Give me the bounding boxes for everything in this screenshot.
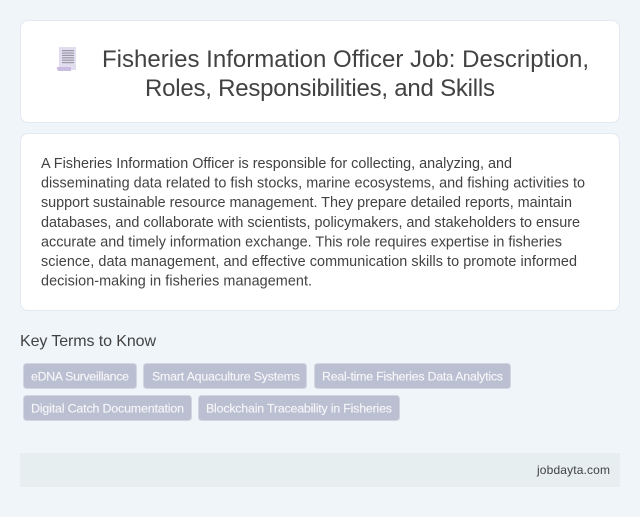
title: Fisheries Information Officer Job: Description, (102, 46, 589, 73)
tag: eDNA Surveillance (24, 364, 136, 388)
description text: A Fisheries Information Officer is responsible for collecting, analyzing, and (41, 156, 512, 172)
description text: support sustainable resource management. They prepare detailed reports, maintain (41, 195, 572, 211)
tag: Blockchain Traceability in Fisheries (198, 396, 400, 420)
tag: Smart Aquaculture Systems (144, 364, 306, 388)
tag: Digital Catch Documentation: Digital Catch Documentation (31, 402, 184, 416)
tag: Real-time Fisheries Data Analytics (314, 364, 510, 388)
panel: description card (20, 133, 620, 311)
description text: databases, and collaborate with scientists, policymakers, and stakeholders to ensure (41, 215, 580, 231)
title (102, 46, 589, 102)
description text: disseminating data related to fish stocks, marine ecosystems, and fishing activities to (41, 176, 585, 192)
heading: key terms: Key Terms to Know (20, 333, 156, 350)
description text: decision-making in fisheries management. (41, 274, 312, 290)
description text: science, data management, and effective communication skills to promote informed (41, 254, 577, 270)
tag: eDNA Surveillance: eDNA Surveillance (31, 370, 129, 384)
tag list (23, 363, 511, 421)
icon: document scroll (57, 47, 76, 71)
title: Roles, Responsibilities, and Skills (145, 75, 495, 102)
panel: title card (20, 20, 620, 123)
tag: Real-time Fisheries Data Analytics: Real-time Fisheries Data Analytics (322, 370, 503, 384)
tag: Blockchain Traceability in Fisheries: Blockchain Traceability in Fisheries (206, 402, 392, 416)
tag: Digital Catch Documentation (24, 396, 192, 420)
footer bar (20, 453, 620, 487)
description text: accurate and timely information exchange. This role requires expertise in fisheries (41, 234, 562, 250)
tag: Smart Aquaculture Systems: Smart Aquaculture Systems (152, 370, 300, 384)
footer text: jobdayta.com (536, 463, 610, 477)
description text (41, 156, 585, 290)
